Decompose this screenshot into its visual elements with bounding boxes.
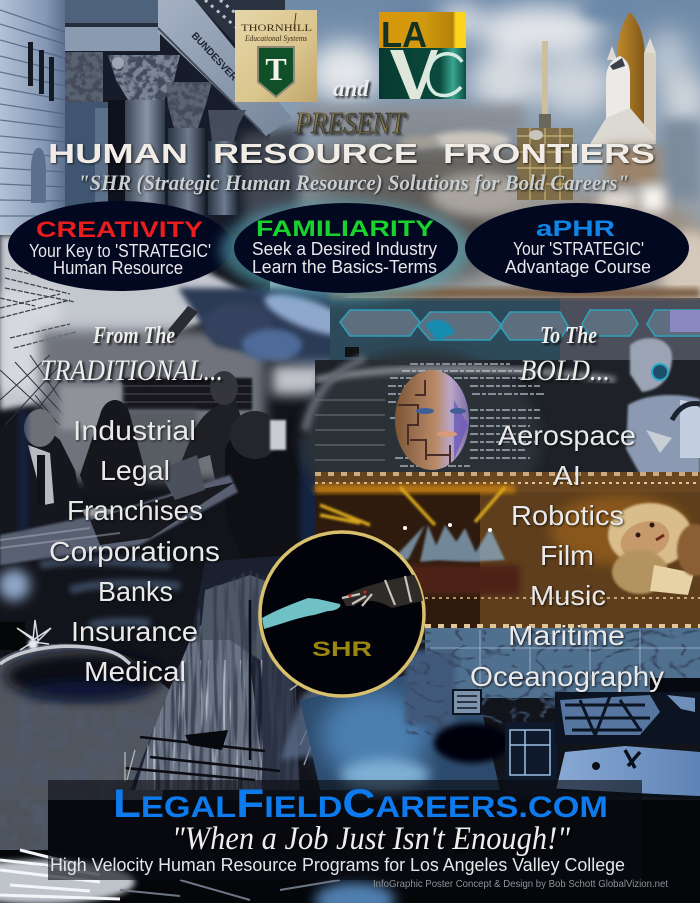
- panel: creativity: CREATIVITY: [36, 217, 203, 242]
- smoke plume: [280, 105, 700, 310]
- panel: creativity: Your Key to 'STRATEGIC': [29, 241, 211, 261]
- bottom call to action: [48, 780, 668, 890]
- logo: Thornhill: [235, 10, 317, 102]
- space shuttle: [590, 12, 665, 212]
- list: traditional industries: Franchises: [67, 495, 203, 526]
- subtitle: "SHR (Strategic Human Resource) Solutions for Bold Careers": [78, 170, 629, 195]
- ships on harbour: [405, 628, 700, 798]
- panel: aphr: aPHR: [536, 216, 615, 241]
- title: FRONTIERS: [443, 138, 655, 169]
- film actress: [608, 503, 700, 595]
- list: bold industries: Film: [540, 540, 594, 571]
- heading: to the bold: [520, 323, 610, 387]
- list: bold industries: AI: [553, 460, 581, 491]
- panel: familiarity: [220, 200, 472, 300]
- list: bold industries: Music: [530, 580, 606, 611]
- panel: aphr: Advantage Course: [505, 257, 651, 277]
- logo: LAVC: LA: [381, 14, 427, 55]
- dark arena: [300, 350, 700, 530]
- ocean waves: [0, 800, 700, 903]
- title: HUMAN: [48, 138, 188, 169]
- sci-fi corridor: [330, 288, 700, 360]
- list: bold industries: [470, 420, 664, 692]
- moon: [0, 620, 170, 800]
- sailing ship: [125, 555, 335, 795]
- AI face: [395, 370, 469, 470]
- title: [48, 138, 655, 169]
- pen and hand: [168, 285, 360, 395]
- SHR circle badge: [260, 532, 426, 696]
- logo: Thornhill: Educational Systems: [244, 34, 307, 43]
- heading: from the traditional: [40, 323, 223, 387]
- heading: to the bold: BOLD...: [520, 354, 610, 387]
- list: bold industries: Aerospace: [498, 420, 636, 451]
- robot: [626, 338, 700, 474]
- brick wall: [0, 0, 65, 235]
- concert stage lights: [320, 487, 520, 595]
- code lines: [388, 364, 544, 466]
- newspaper document: [0, 235, 260, 410]
- list: traditional industries: Industrial: [73, 415, 196, 446]
- faded lettering: BUNDESVER: [189, 31, 240, 84]
- website url: LEGAL FIELDCAREERS .COM: [113, 782, 608, 826]
- meeting people: [0, 371, 318, 595]
- heading: from the traditional: From The: [92, 323, 175, 349]
- icon: human and robot hands: [262, 572, 426, 629]
- panel: creativity: Human Resource: [53, 258, 183, 278]
- panel: familiarity: Seek a Desired Industry: [252, 239, 437, 259]
- list: traditional industries: Corporations: [49, 536, 220, 567]
- panel: creativity: [8, 201, 232, 291]
- present: PRESENT: [294, 105, 407, 140]
- list: traditional industries: Banks: [98, 576, 173, 607]
- film strip: [315, 472, 700, 632]
- panel: aphr: [465, 203, 689, 293]
- list: traditional industries: Insurance: [71, 616, 198, 647]
- list: bold industries: Maritime: [508, 620, 625, 651]
- tagline: "When a Job Just Isn't Enough!": [172, 821, 570, 857]
- traditional column: [40, 323, 223, 687]
- and: and: [333, 76, 369, 101]
- list: traditional industries: [49, 415, 220, 687]
- greek building: [0, 0, 308, 238]
- list: bold industries: Robotics: [511, 500, 624, 531]
- credit: InfoGraphic Poster Concept & Design by Bob Schott GlobalVizion.net: [373, 878, 668, 890]
- logo: LAVC: [379, 12, 466, 99]
- title: RESOURCE: [213, 138, 418, 169]
- sky and clouds: [270, 0, 700, 300]
- dark lower left sky: [0, 561, 180, 650]
- list: traditional industries: Medical: [84, 656, 186, 687]
- logo: Thornhill: T: [265, 51, 287, 87]
- heading: to the bold: To The: [540, 323, 597, 349]
- logo: Thornhill: THORNHILL: [241, 24, 312, 34]
- launch tower: [517, 41, 573, 200]
- entablature: [158, 0, 292, 136]
- heading: from the traditional: TRADITIONAL...: [40, 354, 223, 387]
- stormy sky glow: [300, 660, 500, 791]
- list: bold industries: Oceanography: [470, 661, 664, 692]
- bold column: [470, 323, 664, 692]
- office wall: [0, 330, 265, 480]
- list: traditional industries: Legal: [100, 455, 170, 486]
- panel: familiarity: FAMILIARITY: [256, 216, 434, 241]
- label: SHR: SHR: [312, 638, 372, 661]
- capitals: [65, 52, 246, 141]
- panel: aphr: Your 'STRATEGIC': [513, 239, 644, 259]
- panel: familiarity: Learn the Basics-Terms: [252, 257, 437, 277]
- program line: High Velocity Human Resource Programs for Los Angeles Valley College: [50, 855, 625, 875]
